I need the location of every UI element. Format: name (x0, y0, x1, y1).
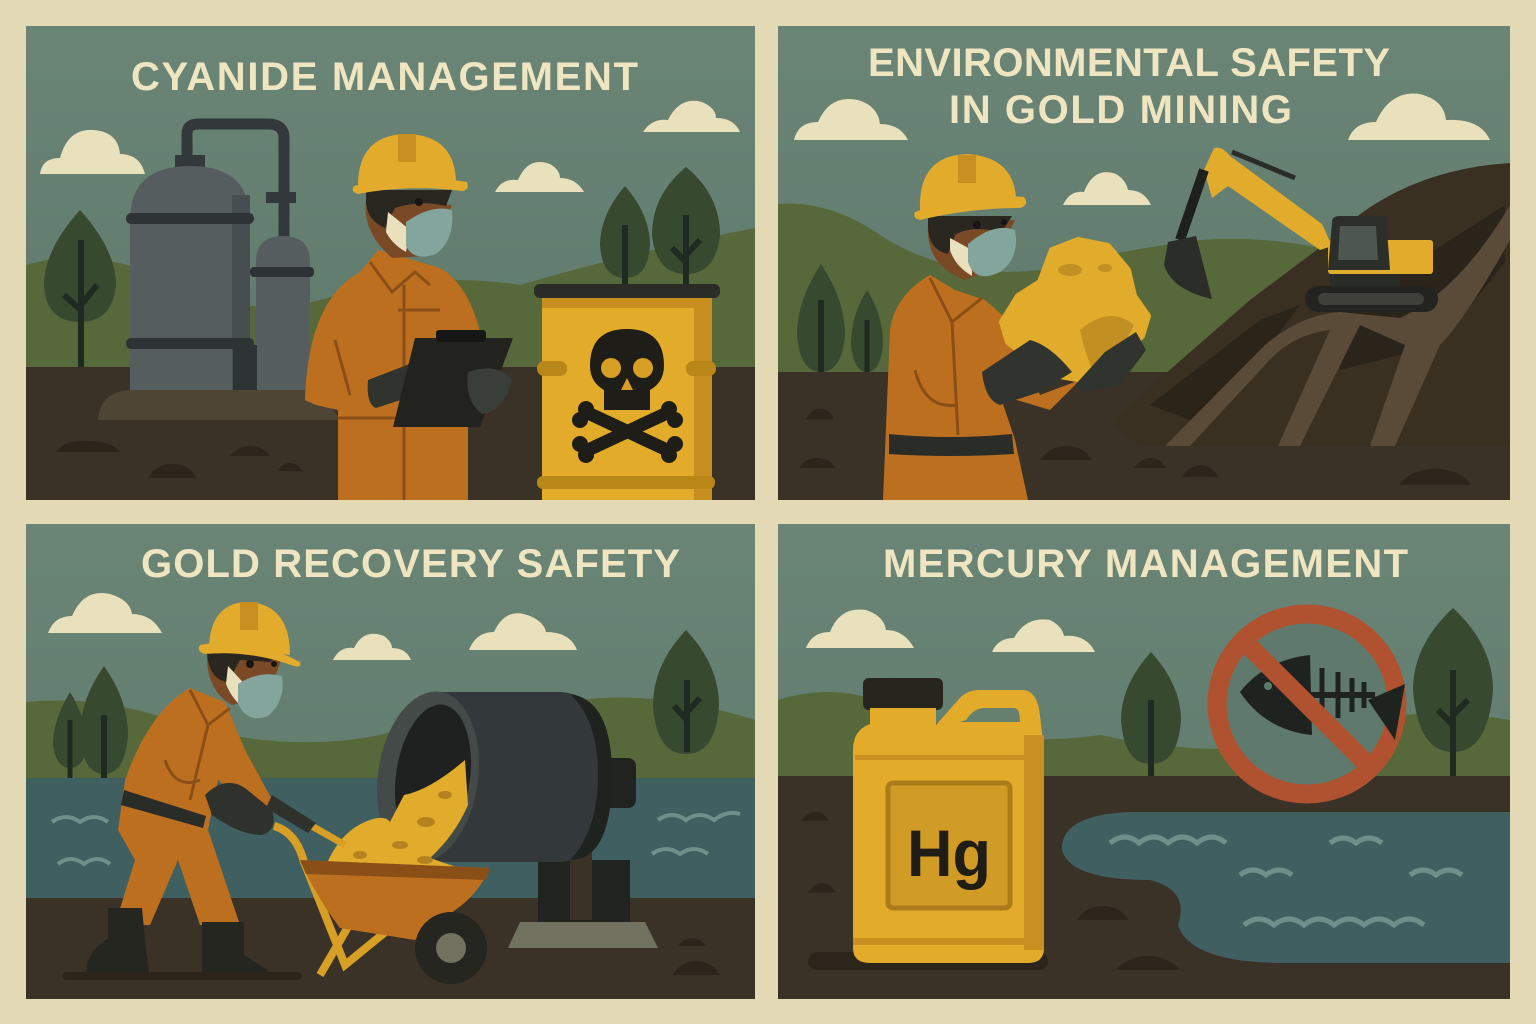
icon: fish skeleton (1240, 655, 1405, 740)
icon: processing tanks (98, 124, 340, 420)
worker with clipboard (305, 134, 513, 500)
water ripples (1110, 837, 1462, 925)
heading: gold recovery safety: GOLD RECOVERY SAFETY (141, 542, 680, 586)
panel: mercury management (778, 524, 1510, 999)
panel: environmental safety (778, 26, 1510, 500)
icon: tumbling mill (325, 685, 658, 948)
clouds (48, 593, 577, 660)
icon: gold nugget (1002, 240, 1148, 382)
heading: mercury management: MERCURY MANAGEMENT (883, 542, 1408, 586)
heading: environmental safety (870, 48, 1390, 124)
trees (1121, 608, 1493, 776)
icon: barrel with skull (534, 284, 720, 500)
panel: cyanide management (26, 26, 755, 500)
trees (53, 630, 719, 778)
pond (1062, 812, 1510, 963)
worker with wheelbarrow (86, 602, 316, 980)
icon: wheelbarrow (274, 825, 490, 984)
gold ore stream (328, 760, 468, 866)
clouds (40, 101, 740, 192)
heading: environmental safety: ENVIRONMENTAL SAFETY (868, 41, 1390, 85)
trees (797, 264, 883, 372)
clouds (806, 609, 1095, 652)
worker with gold nugget (883, 154, 1148, 500)
heading: environmental safety: IN GOLD MINING (949, 88, 1292, 132)
icon: excavator (1164, 148, 1438, 312)
mine slope (1150, 163, 1510, 446)
icon: mercury jug (853, 678, 1044, 963)
trees (44, 167, 720, 367)
water ripples (52, 813, 740, 864)
heading: cyanide management: CYANIDE MANAGEMENT (131, 55, 638, 99)
label: Hg: Hg (907, 816, 991, 890)
icon: no fish sign (1217, 614, 1405, 794)
panel: gold recovery safety (26, 524, 755, 999)
clouds (794, 94, 1490, 205)
icon: skull and crossbones (572, 329, 683, 463)
